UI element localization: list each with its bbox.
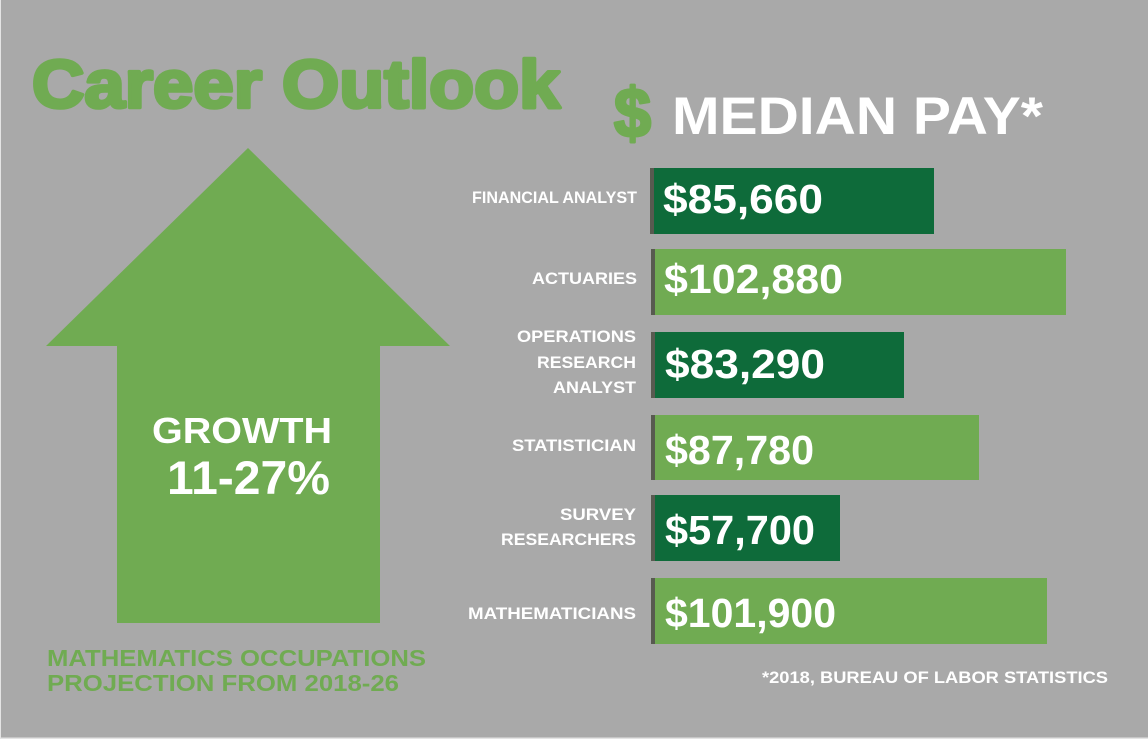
bar row: operations research analyst: $83,290	[665, 341, 825, 387]
bar row: mathematicians	[468, 578, 1047, 644]
bar row: mathematicians: MATHEMATICIANS	[468, 604, 636, 623]
bar row: survey researchers: RESEARCHERS	[501, 530, 636, 549]
bar row: operations research analyst: RESEARCH	[537, 353, 636, 372]
bar row: survey researchers: $57,700	[665, 507, 815, 553]
growth percentage: 11-27%	[167, 451, 330, 504]
title: Career	[32, 46, 262, 122]
bar row: operations research analyst: ANALYST	[553, 378, 637, 397]
bar row: statistician: $87,780	[665, 427, 814, 473]
bar row: actuaries: $102,880	[664, 256, 843, 302]
icon: dollar sign: $	[614, 74, 651, 152]
projection caption: PROJECTION FROM 2018-26	[47, 670, 399, 696]
title	[32, 46, 560, 122]
bar row: mathematicians: $101,900	[665, 590, 836, 636]
bar row: financial analyst: FINANCIAL ANALYST	[472, 188, 638, 207]
bar row: financial analyst: $85,660	[663, 176, 823, 222]
footnote: *2018, BUREAU OF LABOR STATISTICS	[762, 668, 1108, 687]
bar row: survey researchers	[501, 495, 840, 561]
projection caption: MATHEMATICS OCCUPATIONS	[47, 645, 426, 671]
title: Outlook	[282, 46, 560, 122]
bar row: statistician: STATISTICIAN	[512, 436, 636, 455]
bar row: operations research analyst	[517, 327, 904, 398]
bar row: actuaries	[532, 249, 1066, 315]
growth label: GROWTH	[152, 410, 332, 451]
bar row: survey researchers: SURVEY	[560, 505, 637, 524]
projection caption	[47, 645, 426, 696]
median pay heading: MEDIAN PAY*	[672, 87, 1043, 146]
bar row: financial analyst	[472, 168, 934, 234]
bar row: operations research analyst: OPERATIONS	[517, 327, 636, 346]
bar row: actuaries: ACTUARIES	[532, 269, 637, 288]
growth arrow	[46, 148, 450, 623]
bar row: statistician	[512, 415, 979, 480]
